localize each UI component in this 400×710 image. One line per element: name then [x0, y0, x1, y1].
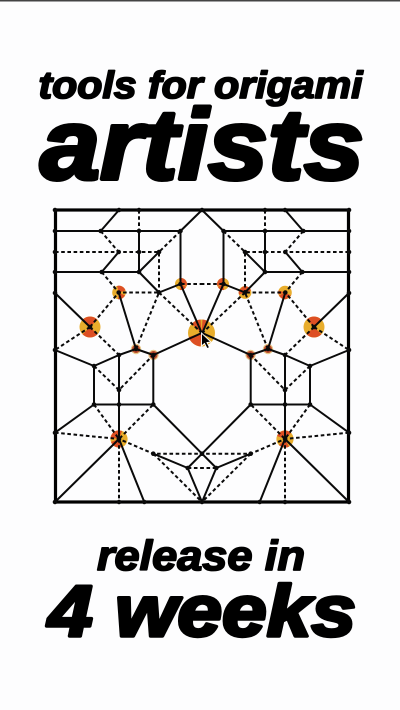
vertex: pale right — [263, 344, 273, 354]
mountain folds right — [202, 210, 349, 502]
vertices right — [216, 210, 349, 502]
vertex: centre — [188, 320, 215, 346]
valley folds left — [55, 210, 202, 502]
mountain folds left — [55, 210, 202, 502]
vertex: upper left — [112, 286, 126, 299]
left half of crease lines — [55, 210, 202, 502]
vertex: right outer — [304, 316, 324, 338]
crease pattern diagram — [55, 210, 349, 502]
vertex: inner left — [175, 278, 187, 290]
highlighted vertices — [80, 278, 324, 448]
vertex: pale left — [131, 344, 141, 354]
valley folds right — [202, 210, 349, 502]
heading: release in: release in — [97, 532, 305, 579]
vertex: pale centre left — [148, 350, 159, 360]
vertex: pale centre right — [245, 350, 256, 360]
icon: mouse cursor — [202, 333, 211, 348]
heading: 4 weeks: 4 weeks — [46, 572, 356, 652]
outer square frame — [56, 210, 348, 502]
vertex: lower left — [110, 430, 128, 448]
vertex: lower right — [276, 430, 294, 448]
vertex: left outer — [80, 316, 100, 338]
vertex: inner right — [217, 278, 229, 290]
heading: artists: artists — [40, 89, 364, 201]
vertex: inner right lower — [239, 286, 251, 299]
right half of crease lines — [202, 210, 349, 502]
vertex: upper right — [278, 286, 292, 299]
heading: tools for origami: tools for origami — [38, 65, 364, 107]
vertices left — [55, 210, 202, 502]
